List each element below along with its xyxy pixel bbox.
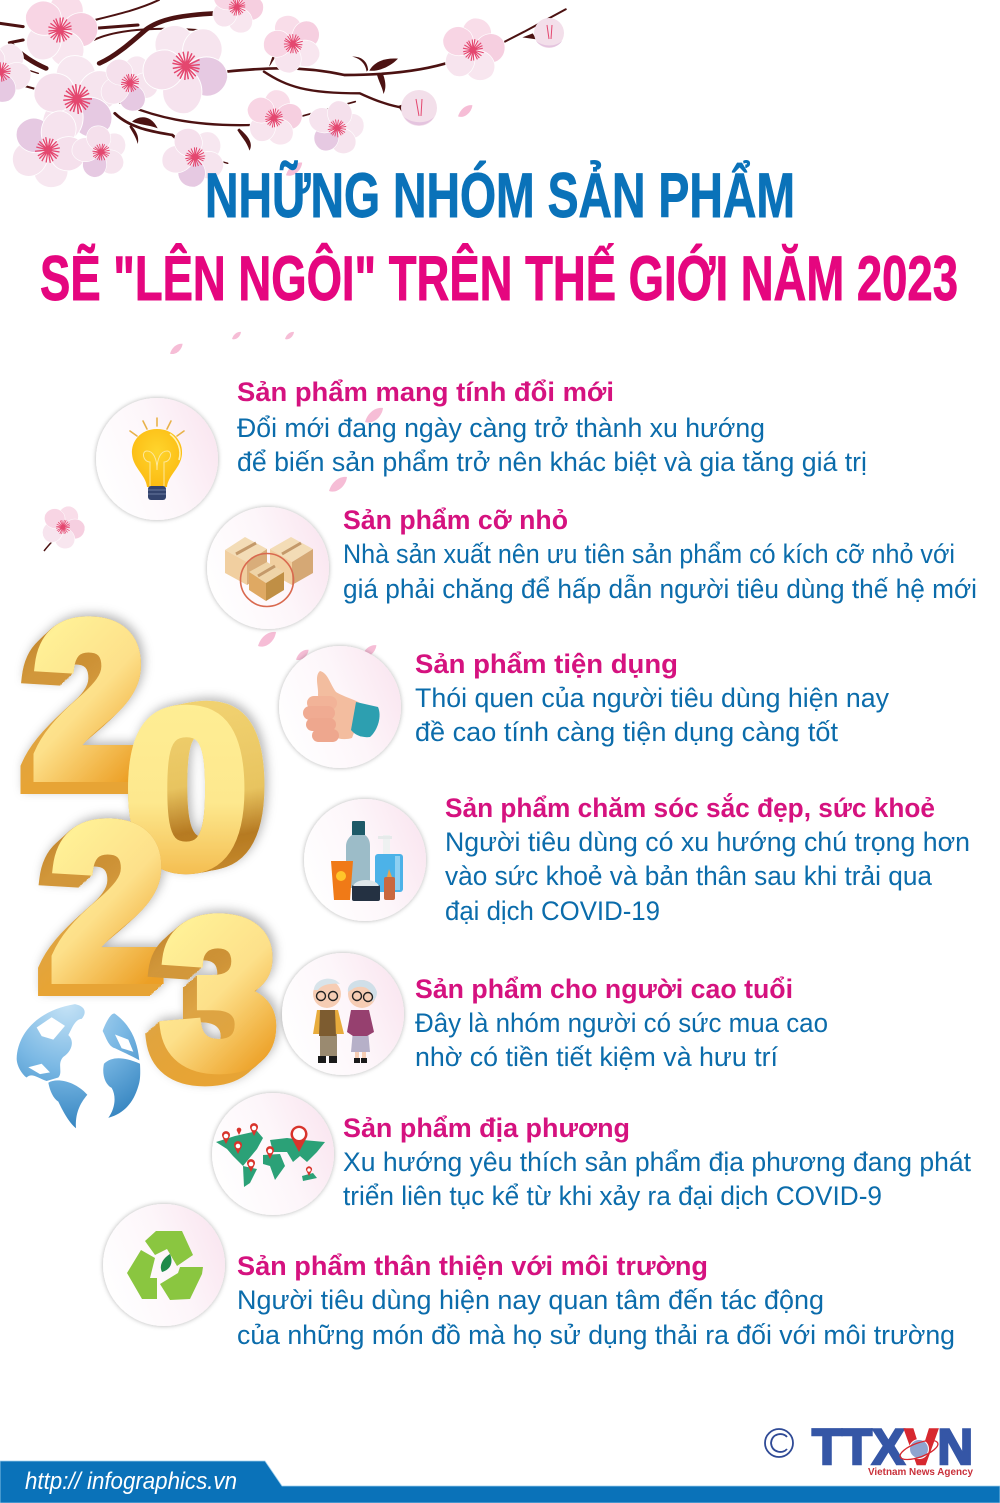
illustration: golden 3D 2023 (32, 578, 278, 1111)
text block: đề cao tính càng tiện dụng càng tốt (415, 717, 838, 747)
item: innovative products (96, 377, 867, 520)
text block: đại dịch COVID-19 (445, 896, 660, 926)
icon circle (279, 646, 401, 768)
text block: nhờ có tiền tiết kiệm và hưu trí (415, 1042, 778, 1072)
text block: Đây là nhóm người có sức mua cao (415, 1008, 828, 1038)
icon circle (304, 799, 426, 921)
illustration: globe (17, 1004, 140, 1128)
icon: elderly couple (313, 979, 377, 1063)
icon: thumbs up (303, 671, 380, 742)
icon: world map with pins (216, 1123, 325, 1187)
text block (343, 1147, 971, 1211)
text block: Người tiêu dùng hiện nay quan tâm đến tác động (237, 1285, 824, 1315)
icon circle (212, 1093, 334, 1215)
icon: recycle symbol with leaf (127, 1231, 203, 1300)
heading: Sản phẩm cỡ nhỏ (343, 505, 568, 535)
small blossom (31, 497, 94, 559)
text block: Đổi mới đang ngày càng trở thành xu hướng (237, 413, 765, 443)
heading: Sản phẩm mang tính đổi mới (237, 377, 614, 407)
cherry blossom branch (0, 0, 566, 205)
icon circle (207, 507, 329, 629)
footer bar (0, 1461, 1000, 1503)
text block: vào sức khoẻ và bản thân sau khi trải qua (445, 861, 933, 891)
text block: Người tiêu dùng có xu hướng chú trọng hơn (445, 827, 970, 857)
falling petals (170, 105, 472, 660)
text block: triển liên tục kể từ khi xảy ra đại dịch COVID-9 (343, 1181, 882, 1211)
illustration: golden 3D 2023: 2 (50, 780, 166, 1025)
text block: Xu hướng yêu thích sản phẩm địa phương đang phát (343, 1147, 971, 1177)
text block: Nhà sản xuất nên ưu tiên sản phẩm có kích cỡ nhỏ với (343, 539, 955, 569)
icon circle (103, 1204, 225, 1326)
heading: Sản phẩm thân thiện với môi trường (237, 1251, 708, 1281)
text block (343, 539, 977, 604)
item: eco-friendly products (103, 1204, 955, 1350)
heading: Sản phẩm cho người cao tuổi (415, 974, 793, 1004)
heading: Sản phẩm tiện dụng (415, 649, 678, 679)
icon: cosmetic bottles (331, 821, 403, 901)
logo: TTXVN: Vietnam News Agency (868, 1466, 973, 1478)
heading: Sản phẩm chăm sóc sắc đẹp, sức khoẻ (445, 792, 935, 823)
heading: Sản phẩm địa phương (343, 1113, 630, 1143)
icon: cardboard boxes (225, 537, 313, 606)
text block (237, 413, 867, 477)
item: convenient products (279, 646, 889, 768)
title: NHỮNG NHÓM SẢN PHẨM (205, 160, 795, 231)
text block (415, 683, 889, 747)
text block (415, 1008, 828, 1072)
item: products for the elderly (282, 953, 828, 1075)
icon circle (96, 398, 218, 520)
text block (445, 827, 970, 926)
illustration: golden 3D 2023: 0 (123, 663, 250, 917)
icon: light bulb (130, 418, 184, 500)
item: small-size products (207, 505, 977, 629)
text block: của những món đồ mà họ sử dụng thải ra đối với môi trường (237, 1320, 955, 1350)
copyright symbol (765, 1429, 793, 1457)
text block: để biến sản phẩm trở nên khác biệt và gia tăng giá trị (237, 447, 867, 477)
illustration: golden 3D 2023: 2 (50, 780, 166, 1025)
illustration: golden 3D 2023: 0 (123, 663, 250, 917)
illustration: golden 3D 2023: 3 (161, 876, 278, 1111)
item: beauty and health products (304, 792, 970, 926)
text block (237, 1285, 955, 1350)
illustration: golden 3D 2023: 2 (32, 578, 146, 824)
text block: giá phải chăng để hấp dẫn người tiêu dùng thế hệ mới (343, 573, 977, 604)
footer url: http:// infographics.vn (25, 1468, 237, 1495)
item: local products (212, 1093, 971, 1215)
illustration: golden 3D 2023: 2 (32, 578, 146, 824)
illustration: golden 3D 2023: 3 (161, 876, 278, 1111)
logo: TTXVN: TTXVN (812, 1419, 973, 1475)
title (40, 160, 958, 314)
icon circle (282, 953, 404, 1075)
text block: Thói quen của người tiêu dùng hiện nay (415, 683, 889, 713)
